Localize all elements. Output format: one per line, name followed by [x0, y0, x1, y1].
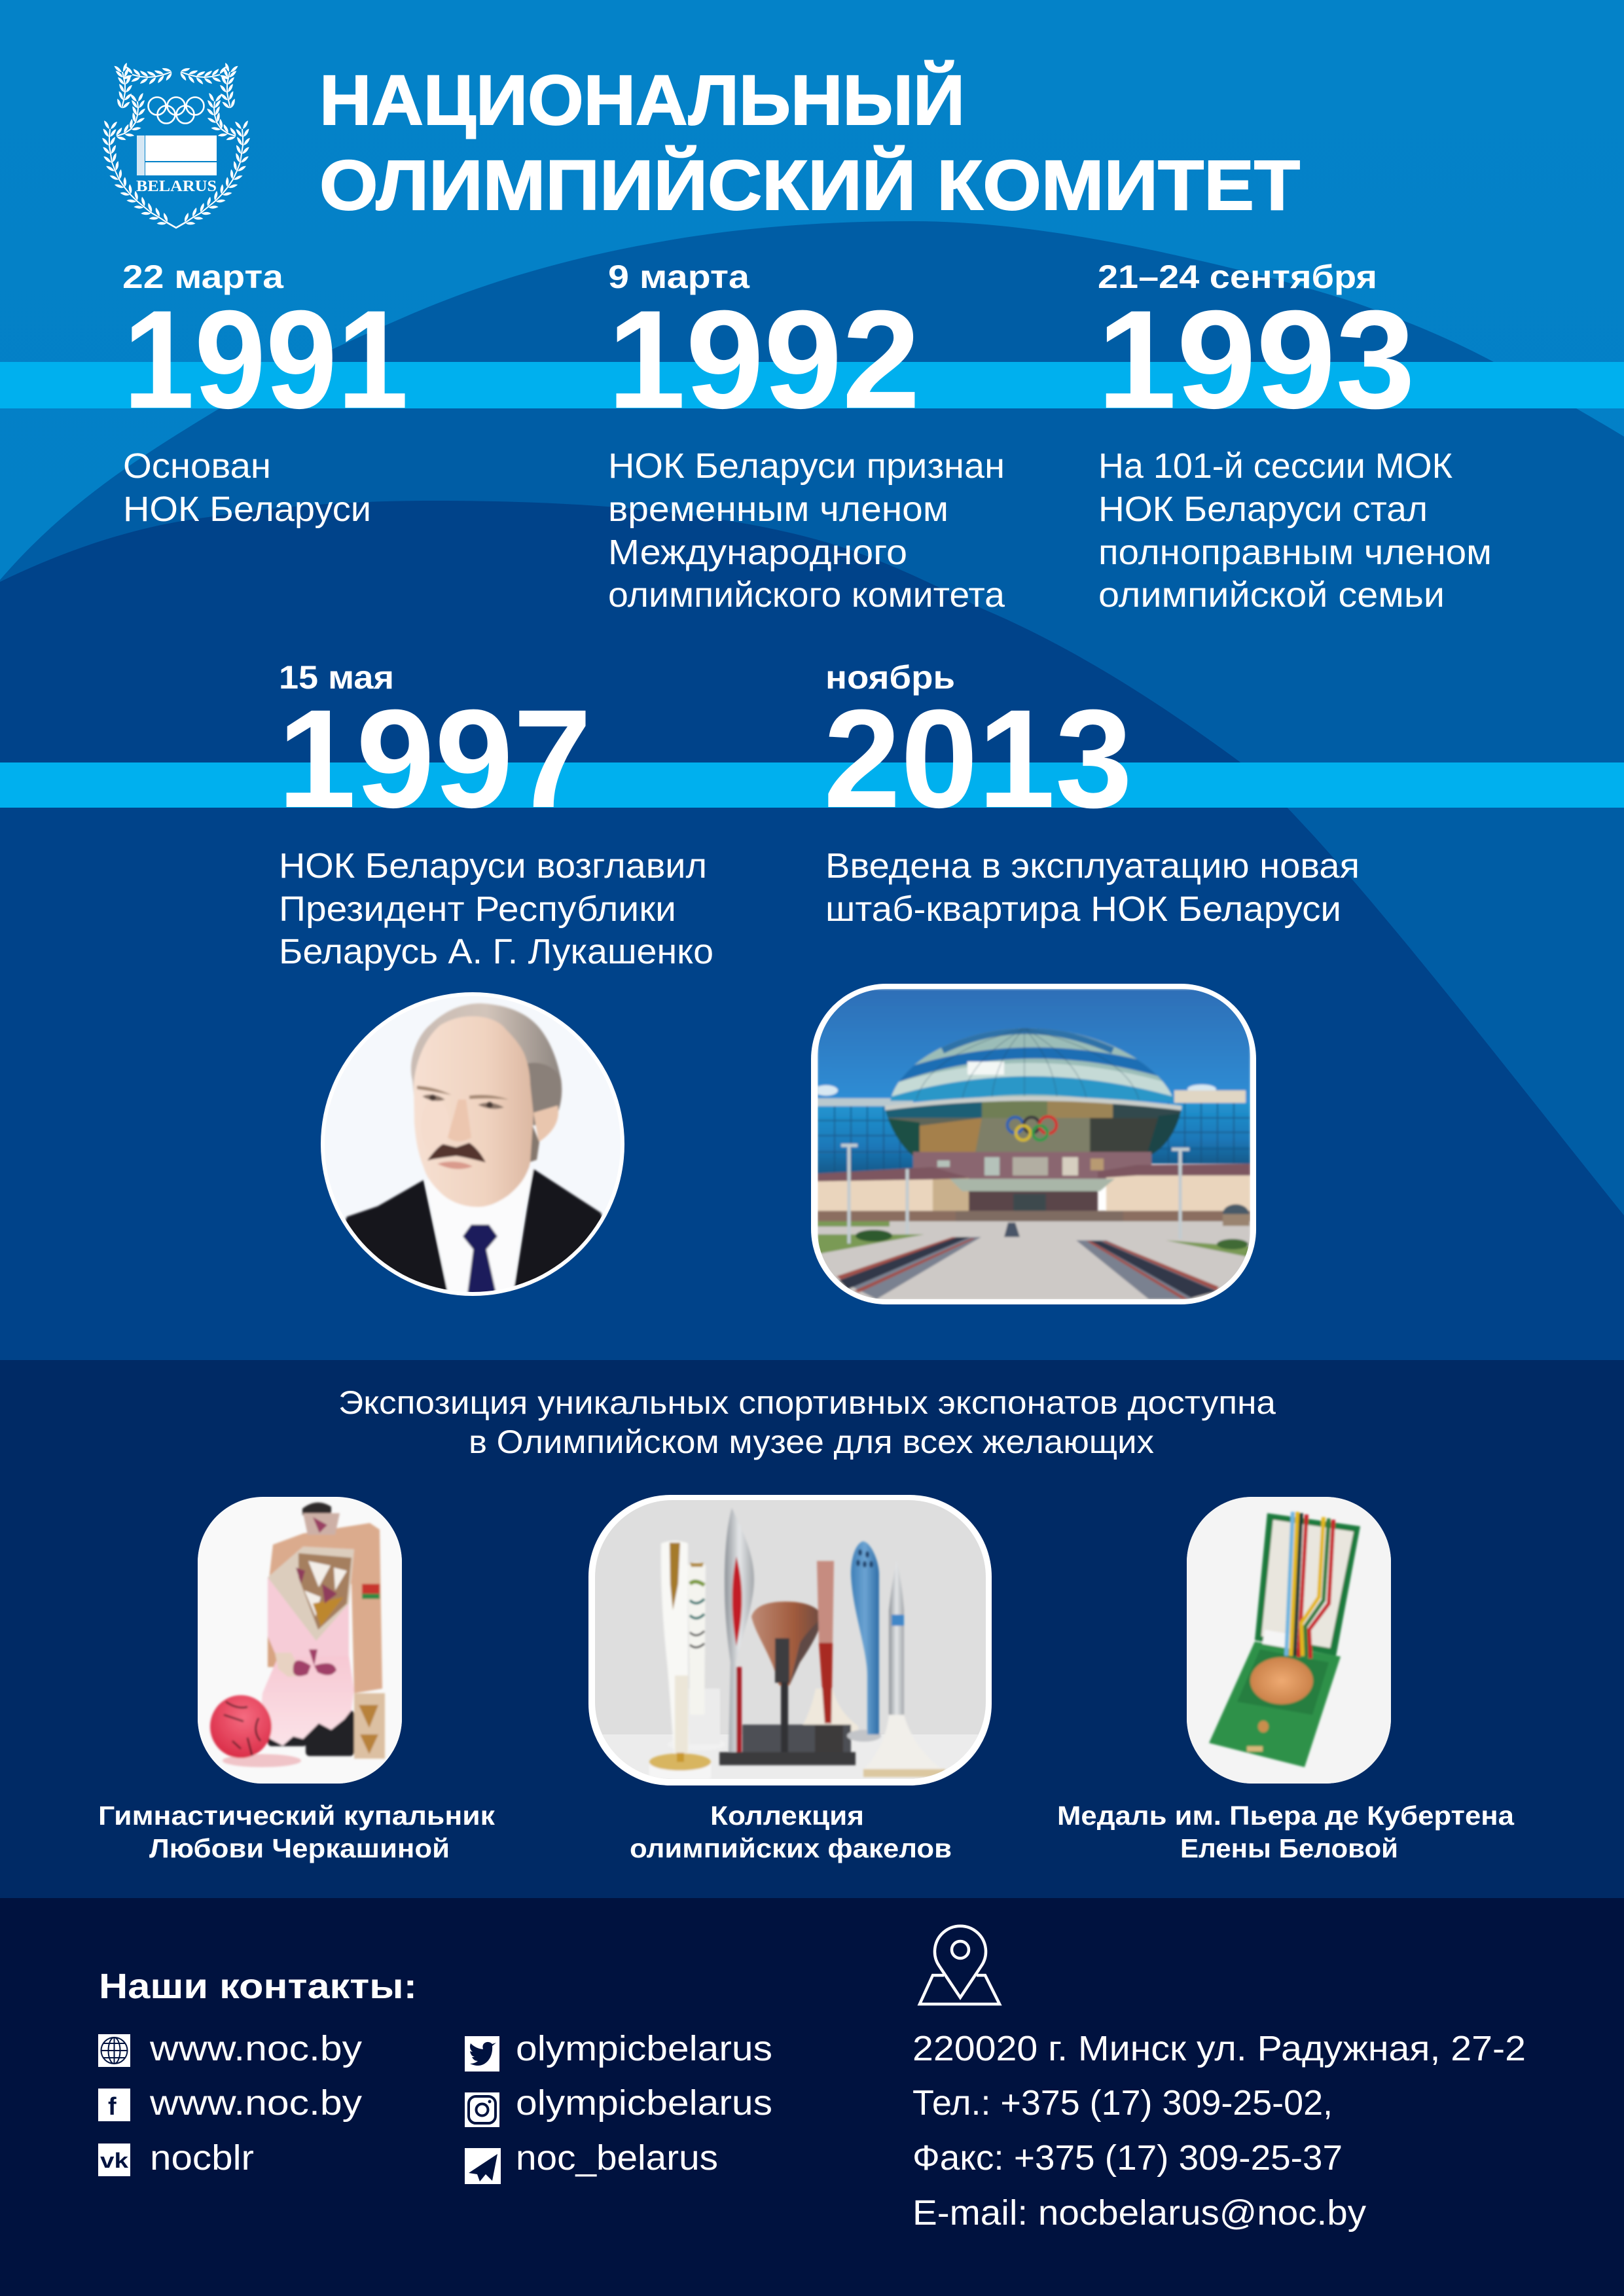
contacts heading: Наши контакты:	[99, 1967, 417, 2006]
milestone 2013: 2013	[823, 681, 1132, 837]
milestone 1991: 22 марта	[122, 259, 284, 295]
caption: torches: Коллекция	[710, 1801, 864, 1831]
museum intro text: в Олимпийском музее для всех желающих	[469, 1424, 1154, 1460]
contacts panel background	[0, 1898, 1624, 2296]
logo: NOC Belarus shield: BELARUS	[136, 178, 217, 195]
photo: portrait	[314, 992, 628, 1302]
address block: 220020 г. Минск ул. Радужная, 27-2	[912, 2029, 1526, 2068]
milestone 1991: Основан	[123, 446, 271, 486]
cyan timeline band 2	[0, 762, 1624, 808]
photo: headquarters building	[811, 984, 1256, 1304]
caption: medal: Медаль им. Пьера де Кубертена	[1057, 1801, 1515, 1831]
logo: NOC Belarus shield	[109, 72, 243, 228]
museum intro text	[338, 1384, 1276, 1460]
milestone 1997: 1997	[278, 681, 592, 837]
contact: facebook: www.noc.by	[149, 2083, 362, 2123]
title: ОЛИМПИЙСКИЙ КОМИТЕТ	[319, 145, 1300, 224]
milestone 1993: НОК Беларуси стал	[1098, 490, 1428, 529]
milestone 1997: 15 мая	[279, 659, 394, 696]
address block: Тел.: +375 (17) 309-25-02,	[912, 2083, 1333, 2123]
contact: telegram: noc_belarus	[516, 2138, 718, 2178]
milestone 1992	[607, 259, 1005, 615]
cyan timeline band 1	[0, 362, 1624, 408]
caption: torches	[630, 1801, 952, 1863]
caption: leotard: Гимнастический купальник	[98, 1801, 496, 1831]
milestone 1997: Беларусь А. Г. Лукашенко	[279, 932, 713, 971]
milestone 1993: 21–24 сентября	[1098, 259, 1377, 295]
milestone 2013: штаб-квартира НОК Беларуси	[825, 889, 1341, 929]
milestone 1993: 1993	[1097, 281, 1415, 438]
contact: twitter: olympicbelarus	[516, 2029, 772, 2068]
icon: map pin	[920, 1926, 1000, 2004]
contact: vk: nocblr	[150, 2138, 254, 2178]
contact: vk	[98, 2138, 254, 2178]
caption: torches: олимпийских факелов	[630, 1833, 952, 1863]
caption: medal	[1057, 1801, 1515, 1863]
caption: medal: Елены Беловой	[1180, 1833, 1398, 1863]
milestone 1992: Международного	[608, 533, 907, 572]
milestone 2013	[823, 659, 1360, 929]
milestone 1992: НОК Беларуси признан	[608, 446, 1005, 486]
photo: gymnastic leotard	[198, 1497, 402, 1784]
contact: website: www.noc.by	[149, 2029, 362, 2068]
milestone 1997: Президент Республики	[279, 889, 676, 929]
milestone 1991: НОК Беларуси	[123, 490, 371, 529]
caption: leotard: Любови Черкашиной	[149, 1833, 450, 1863]
museum panel background	[0, 1360, 1624, 1898]
milestone 2013: Введена в эксплуатацию новая	[825, 846, 1360, 886]
milestone 1993: На 101-й сессии МОК	[1098, 446, 1453, 486]
milestone 1991: 1991	[123, 281, 408, 438]
milestone 1993: олимпийской семьи	[1098, 575, 1445, 615]
photo: torch collection	[588, 1495, 992, 1785]
photo: Coubertin medal	[1187, 1497, 1391, 1784]
milestone 1997: НОК Беларуси возглавил	[279, 846, 707, 886]
milestone 1993: полноправным членом	[1098, 533, 1492, 572]
milestone 1992: временным членом	[608, 490, 948, 529]
contact: facebook: f	[108, 2093, 117, 2121]
museum intro text: Экспозиция уникальных спортивных экспонатов доступна	[338, 1384, 1276, 1421]
milestone 1993	[1097, 259, 1492, 615]
milestone 1992: олимпийского комитета	[608, 575, 1005, 615]
milestone 2013: ноябрь	[825, 659, 955, 696]
title	[319, 60, 1300, 224]
title: НАЦИОНАЛЬНЫЙ	[319, 60, 965, 139]
address block: E-mail: nocbelarus@noc.by	[912, 2193, 1366, 2233]
caption: leotard	[98, 1801, 496, 1863]
contact: instagram	[465, 2083, 772, 2127]
milestone 1991	[122, 259, 408, 529]
contact: instagram: olympicbelarus	[516, 2083, 772, 2123]
address block	[912, 2029, 1526, 2233]
milestone 1997	[278, 659, 713, 971]
milestone 1992: 9 марта	[608, 259, 750, 295]
contact: telegram	[465, 2138, 718, 2184]
address block: Факс: +375 (17) 309-25-37	[912, 2138, 1343, 2178]
contact: vk: vk	[100, 2149, 128, 2172]
milestone 1992: 1992	[607, 281, 920, 438]
